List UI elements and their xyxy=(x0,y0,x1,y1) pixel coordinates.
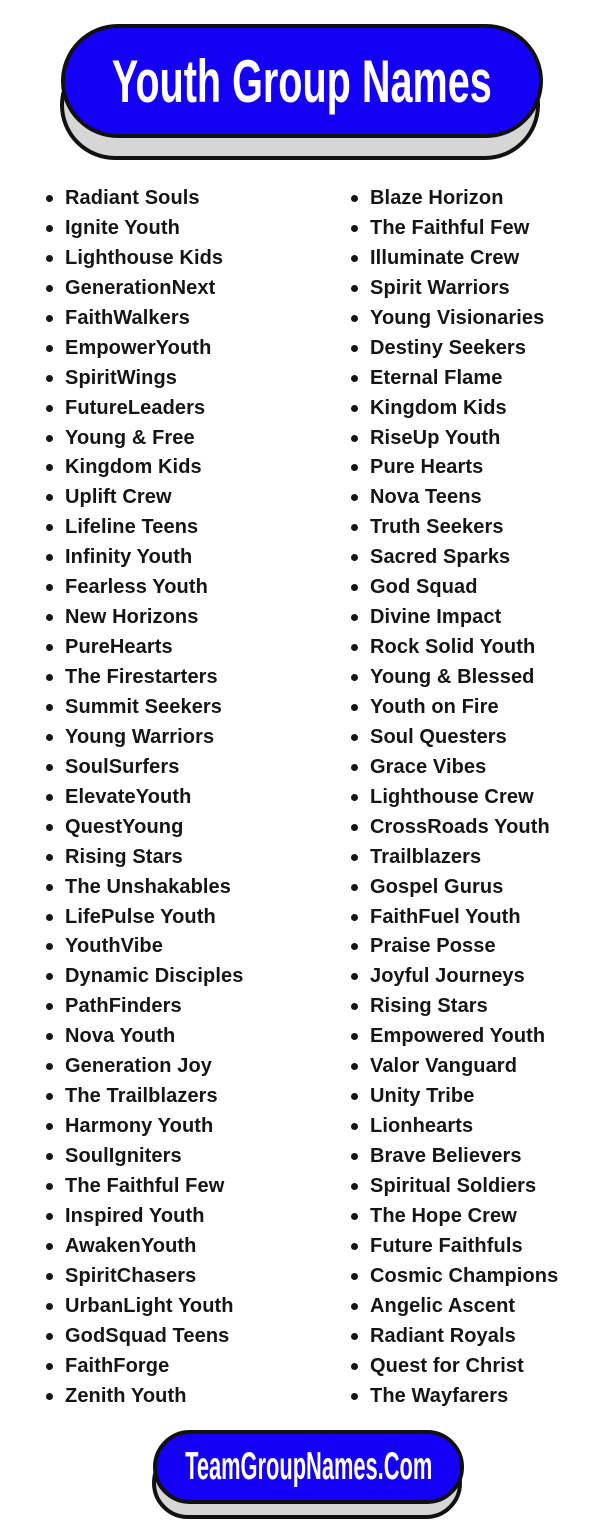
list: right column: Rock Solid Youth xyxy=(370,636,535,658)
list: right column: Rising Stars xyxy=(370,995,488,1017)
list: right column: Trailblazers xyxy=(370,846,481,868)
list: right column: Soul Questers xyxy=(370,726,507,748)
list: left column: Ignite Youth xyxy=(65,217,180,239)
list: left column xyxy=(46,187,243,1406)
list: left column: Harmony Youth xyxy=(65,1115,213,1137)
list: right column: RiseUp Youth xyxy=(370,426,500,448)
list: left column: YouthVibe xyxy=(65,935,163,957)
list: right column: God Squad xyxy=(370,576,478,598)
title xyxy=(61,24,543,138)
list: right column: Gospel Gurus xyxy=(370,876,503,898)
list: right column: Grace Vibes xyxy=(370,756,486,778)
list: left column: Zenith Youth xyxy=(65,1384,187,1406)
list: right column: Illuminate Crew xyxy=(370,247,519,269)
list: left column: The Unshakables xyxy=(65,876,231,898)
header banner xyxy=(60,24,543,160)
list: left column: FaithWalkers xyxy=(65,307,190,329)
list: left column: Fearless Youth xyxy=(65,576,208,598)
list: left column: Uplift Crew xyxy=(65,486,172,508)
list: left column: SpiritChasers xyxy=(65,1265,196,1287)
footer banner xyxy=(152,1430,464,1519)
list: left column: Inspired Youth xyxy=(65,1205,205,1227)
list: left column: PureHearts xyxy=(65,636,173,658)
list: left column: Rising Stars xyxy=(65,846,183,868)
list: left column: Summit Seekers xyxy=(65,696,222,718)
list: left column: The Faithful Few xyxy=(65,1175,224,1197)
list: left column: Lighthouse Kids xyxy=(65,247,223,269)
list: left column: Dynamic Disciples xyxy=(65,965,243,987)
list: right column: Valor Vanguard xyxy=(370,1055,517,1077)
list: left column: Young & Free xyxy=(65,426,195,448)
list: right column: Truth Seekers xyxy=(370,516,504,538)
list: right column: The Hope Crew xyxy=(370,1205,517,1227)
list: right column: Nova Teens xyxy=(370,486,482,508)
list: left column: AwakenYouth xyxy=(65,1235,196,1257)
list: right column: Pure Hearts xyxy=(370,456,483,478)
list: right column: Young Visionaries xyxy=(370,307,544,329)
list: left column: Radiant Souls xyxy=(65,187,200,209)
list: right column: Praise Posse xyxy=(370,935,496,957)
list: right column: Empowered Youth xyxy=(370,1025,545,1047)
list: left column: Generation Joy xyxy=(65,1055,212,1077)
list: left column: Lifeline Teens xyxy=(65,516,198,538)
list: left column: EmpowerYouth xyxy=(65,337,211,359)
footer text: TeamGroupNames.Com xyxy=(185,1445,432,1488)
list: left column: ElevateYouth xyxy=(65,786,191,808)
list: right column: Sacred Sparks xyxy=(370,546,510,568)
list: right column: Destiny Seekers xyxy=(370,337,526,359)
list: left column: Nova Youth xyxy=(65,1025,175,1047)
list: right column: Divine Impact xyxy=(370,606,501,628)
list: left column: QuestYoung xyxy=(65,816,183,838)
list: left column: FaithForge xyxy=(65,1355,169,1377)
list: left column: New Horizons xyxy=(65,606,198,628)
list: left column: The Firestarters xyxy=(65,666,218,688)
list: right column: Joyful Journeys xyxy=(370,965,525,987)
list: right column: Angelic Ascent xyxy=(370,1295,515,1317)
list: right column: FaithFuel Youth xyxy=(370,906,521,928)
list: right column: Youth on Fire xyxy=(370,696,499,718)
list: right column: Unity Tribe xyxy=(370,1085,474,1107)
list: right column: Cosmic Champions xyxy=(370,1265,558,1287)
title: Youth Group Names xyxy=(112,48,492,114)
list: left column: GodSquad Teens xyxy=(65,1325,229,1347)
list: right column: Brave Believers xyxy=(370,1145,522,1167)
list: right column: Lionhearts xyxy=(370,1115,473,1137)
list: right column: Eternal Flame xyxy=(370,367,502,389)
list: left column: Young Warriors xyxy=(65,726,214,748)
list: right column: Radiant Royals xyxy=(370,1325,516,1347)
list: right column: Quest for Christ xyxy=(370,1355,524,1377)
list: right column: Spiritual Soldiers xyxy=(370,1175,536,1197)
list: left column: Infinity Youth xyxy=(65,546,192,568)
list: right column: Lighthouse Crew xyxy=(370,786,534,808)
list: left column: The Trailblazers xyxy=(65,1085,218,1107)
list: right column xyxy=(351,187,558,1406)
list: right column: Blaze Horizon xyxy=(370,187,504,209)
list: right column: Young & Blessed xyxy=(370,666,534,688)
list: left column: SoulIgniters xyxy=(65,1145,182,1167)
list: left column: GenerationNext xyxy=(65,277,215,299)
list: right column: Kingdom Kids xyxy=(370,397,507,419)
list: left column: UrbanLight Youth xyxy=(65,1295,234,1317)
list: left column: Kingdom Kids xyxy=(65,456,202,478)
list: left column: PathFinders xyxy=(65,995,182,1017)
list: right column: Spirit Warriors xyxy=(370,277,510,299)
list: left column: LifePulse Youth xyxy=(65,906,216,928)
list: left column: FutureLeaders xyxy=(65,397,205,419)
list: left column: SoulSurfers xyxy=(65,756,179,778)
list: right column: CrossRoads Youth xyxy=(370,816,550,838)
list: right column: The Wayfarers xyxy=(370,1384,508,1406)
list: right column: Future Faithfuls xyxy=(370,1235,523,1257)
list: right column: The Faithful Few xyxy=(370,217,529,239)
list: left column: SpiritWings xyxy=(65,367,177,389)
footer text xyxy=(153,1430,464,1504)
